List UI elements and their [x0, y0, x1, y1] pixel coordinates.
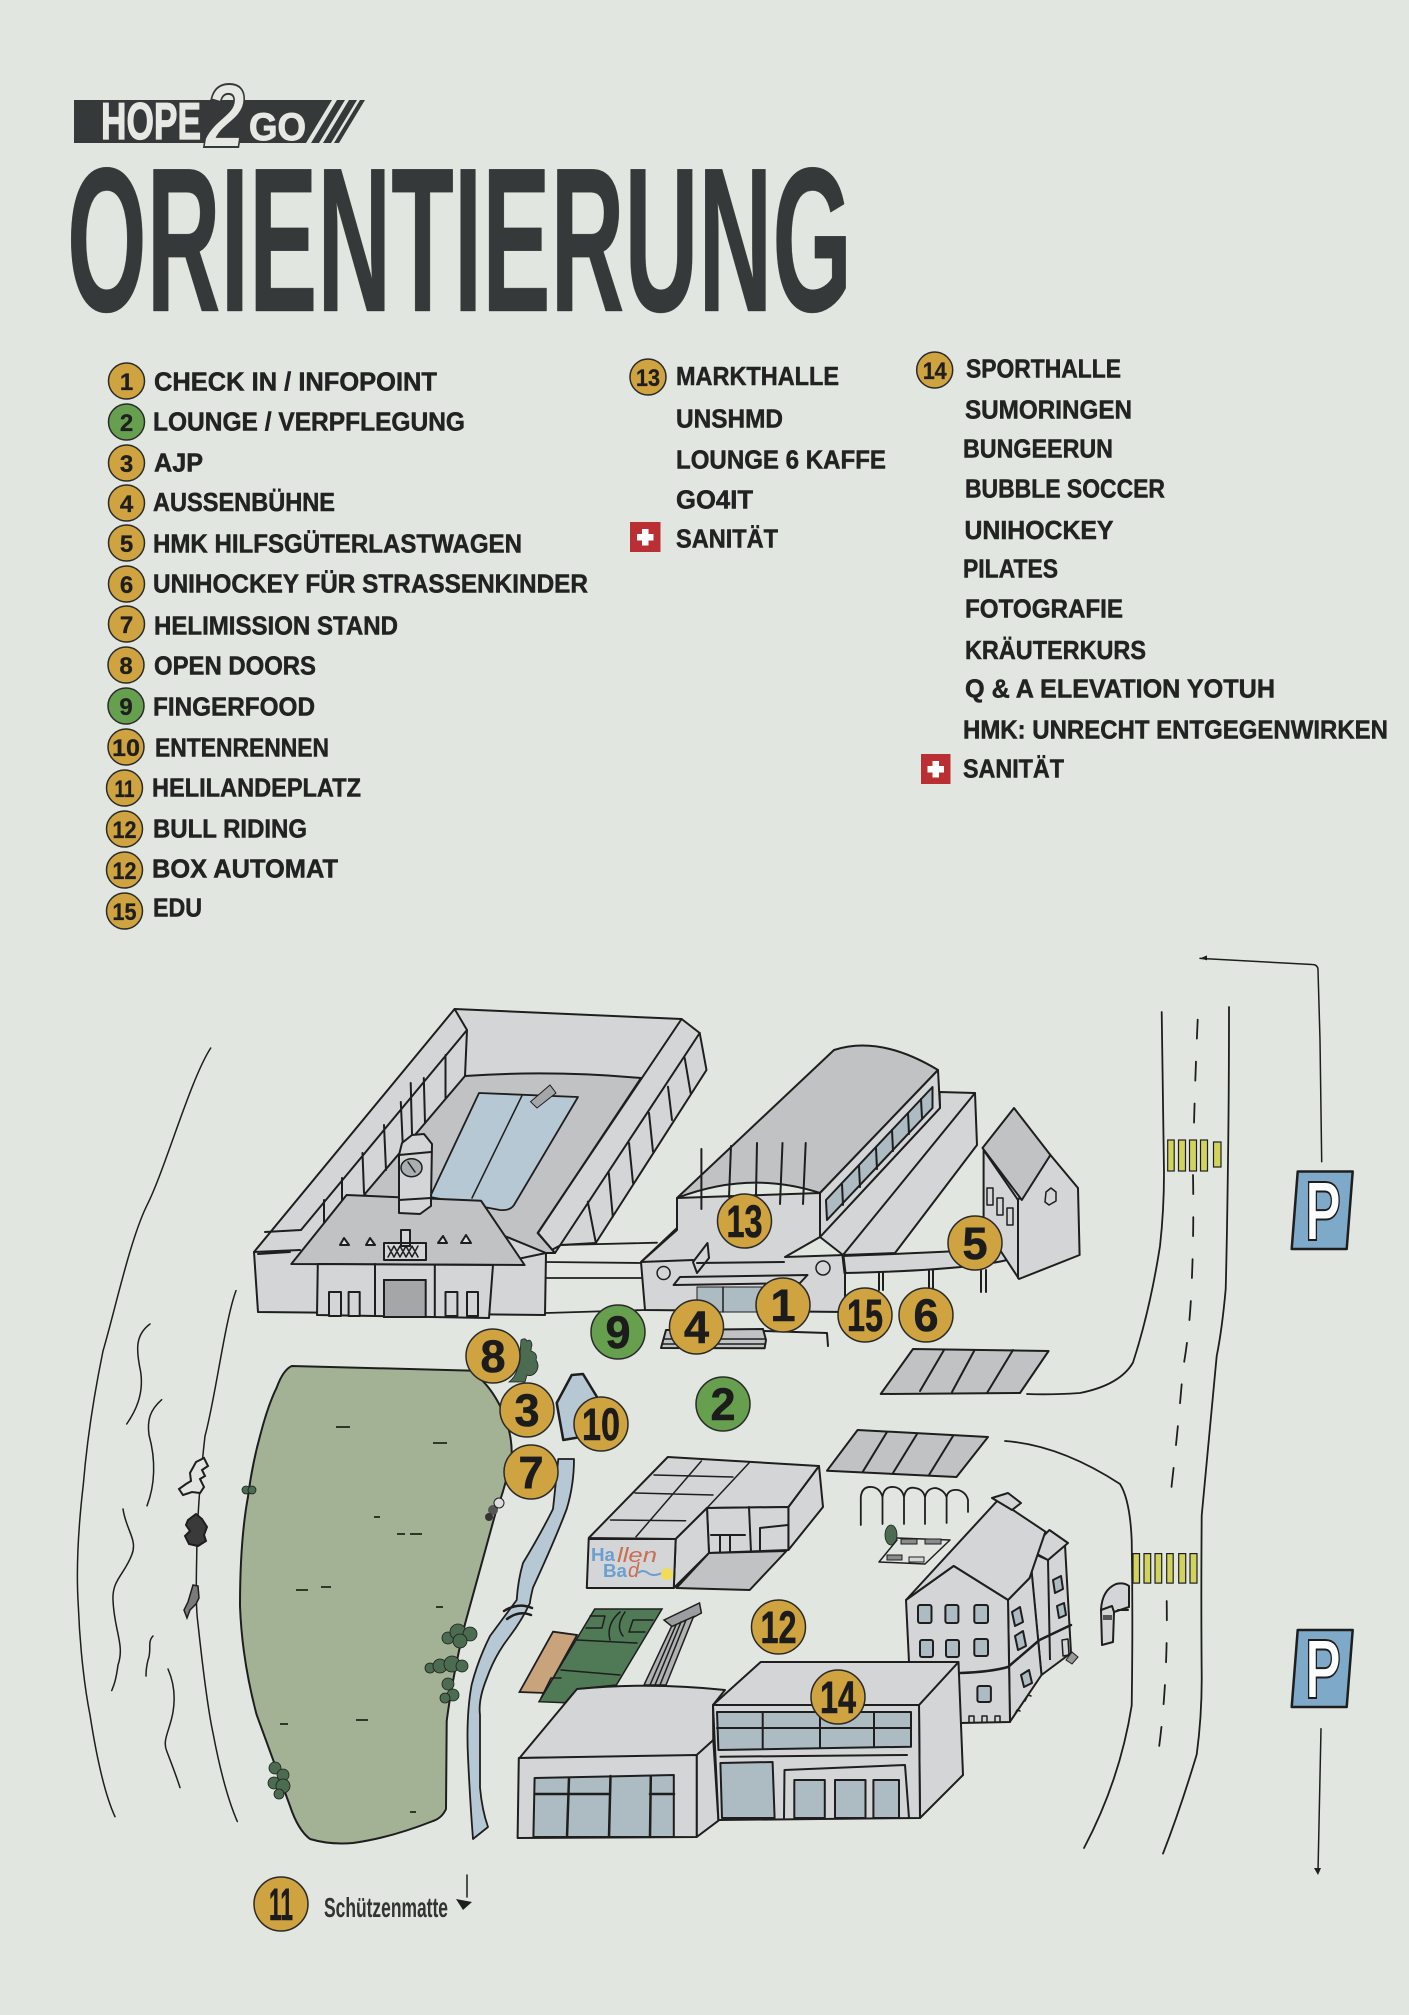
entrance glass: [697, 1287, 763, 1312]
legend item 11: [106, 770, 361, 806]
picnic area: [879, 1525, 950, 1564]
side wall: [1008, 1550, 1042, 1722]
clock tower: [399, 1134, 432, 1214]
marker 10: 10: [582, 1399, 620, 1450]
legend item 12: [106, 811, 307, 847]
dormers: [340, 1235, 471, 1245]
marker 2: [696, 1377, 750, 1431]
logo: Hope2Go: HOPE: [101, 93, 201, 151]
clerestory: [826, 1087, 932, 1220]
marker 14: 14: [820, 1672, 856, 1723]
parking area south: [827, 1430, 988, 1477]
logo: Hope2Go: 2: [203, 67, 245, 167]
building: Hallenbad: [587, 1457, 823, 1590]
footbridge: [504, 1606, 532, 1619]
floor band: [960, 1625, 1071, 1673]
marker 3: 3: [514, 1385, 540, 1436]
marker 1: [756, 1278, 810, 1332]
marker 13: [630, 359, 666, 395]
centre dashes south: [1157, 1601, 1167, 1764]
legend item 9: [108, 688, 315, 724]
legend item 9: 9: [119, 694, 133, 721]
marker 14: 14: [923, 358, 947, 385]
list Markthalle: LOUNGE 6 KAFFE: [676, 445, 886, 475]
marker 9: [591, 1305, 645, 1359]
crosswalk south: [1133, 1554, 1197, 1583]
Hallenbad lettering: d: [628, 1560, 640, 1582]
legend item 2: LOUNGE / VERPFLEGUNG: [153, 407, 465, 437]
marker 9: 9: [605, 1307, 631, 1358]
list Sporthalle: SANITÄT: [963, 754, 1064, 784]
legend item 2: [108, 404, 465, 440]
legend item 15: 15: [112, 899, 136, 926]
pool basin: [430, 1093, 578, 1210]
list Markthalle: UNSHMD: [676, 404, 783, 434]
windows: [918, 1576, 1078, 1722]
parking sign north: P: [1305, 1164, 1341, 1258]
legend item 9: FINGERFOOD: [153, 691, 315, 721]
marker 13: 13: [636, 365, 660, 392]
marker 4: [670, 1300, 724, 1354]
legend item 1: 1: [120, 369, 133, 396]
list Sporthalle: SPORTHALLE: [966, 354, 1121, 384]
front facade: [317, 1264, 493, 1318]
marker 8: [466, 1329, 520, 1383]
front wall: [641, 1193, 845, 1312]
list Sporthalle: UNIHOCKEY: [964, 515, 1114, 545]
Hallenbad lettering: Ba: [603, 1561, 628, 1581]
sports courts: [520, 1603, 701, 1703]
legend item 8: 8: [119, 653, 133, 680]
list Sporthalle: KRÄUTERKURS: [965, 635, 1146, 665]
legend item 3: 3: [120, 451, 133, 478]
tan court: [520, 1632, 577, 1693]
stand: [664, 1603, 701, 1628]
building: Sporthalle: [518, 1662, 963, 1838]
marker 6: 6: [913, 1290, 939, 1341]
river lines: [77, 1048, 237, 1822]
marker 11: 11: [269, 1879, 293, 1930]
list Sporthalle: BUNGEERUN: [963, 434, 1113, 464]
right hall upper glazing: [717, 1712, 911, 1750]
roof detail: [384, 1230, 426, 1260]
legend item 5: 5: [120, 531, 133, 558]
list Sporthalle: PILATES: [963, 554, 1058, 584]
legend column 2: Markthalle: [630, 359, 886, 554]
list Markthalle: [676, 361, 886, 554]
list Sporthalle: Q & A ELEVATION YOTUH: [965, 674, 1275, 704]
office building: [906, 1493, 1078, 1723]
left hall front: [518, 1755, 697, 1838]
marker 5: 5: [962, 1218, 988, 1269]
tree next to marker 8: [509, 1339, 538, 1382]
grass marks: [280, 1427, 447, 1812]
windows: [329, 1292, 478, 1316]
Hallenbad lettering: llen: [617, 1545, 657, 1567]
building: open-air pool: [254, 1009, 706, 1318]
legend item 8: [108, 647, 316, 683]
legend item 3: [108, 445, 203, 481]
parking area north: [881, 1349, 1049, 1394]
legend item 5: HMK HILFSGÜTERLASTWAGEN: [153, 529, 522, 559]
marker 2: 2: [710, 1379, 736, 1430]
list Markthalle: GO4IT: [676, 485, 753, 515]
label: Schützenmatte: Schützenmatte: [324, 1892, 448, 1923]
trees by meadow: [242, 1486, 504, 1799]
arrow to Schützenmatte: [456, 1875, 472, 1910]
parking sign north: [1292, 1164, 1353, 1258]
map markers: [254, 1194, 1002, 1931]
list Sporthalle: FOTOGRAFIE: [965, 594, 1123, 624]
crosswalk north: [1168, 1140, 1221, 1171]
right hall side: [919, 1662, 963, 1818]
roof: [906, 1500, 1045, 1600]
legend item 12: BULL RIDING: [153, 814, 307, 844]
list Sporthalle: [963, 354, 1388, 784]
ribs: [701, 1143, 806, 1209]
right hall front: [713, 1705, 920, 1820]
awning: [843, 1248, 1018, 1273]
legend item 12b: [106, 852, 338, 888]
Hallenbad lettering: Ha: [591, 1545, 616, 1565]
pool deck: [364, 1073, 641, 1253]
marker 7: 7: [518, 1447, 544, 1498]
house: [982, 1108, 1080, 1279]
legend item 15: [106, 893, 202, 929]
list Sporthalle: BUBBLE SOCCER: [965, 474, 1165, 504]
legend item 10: [108, 729, 329, 765]
legend item 6: 6: [120, 572, 133, 599]
logo: Hope2Go: GO: [249, 106, 306, 149]
bike shelters: [861, 1487, 968, 1525]
marker 5: [948, 1216, 1002, 1270]
diving board: [530, 1085, 556, 1108]
marker 7: [504, 1445, 558, 1499]
list Markthalle: MARKTHALLE: [676, 361, 839, 391]
legend column 1: [106, 363, 588, 929]
green court: [539, 1609, 662, 1703]
legend item 10: ENTENRENNEN: [155, 732, 329, 762]
road: [1005, 1007, 1229, 1854]
building: Markthalle: [641, 1046, 1018, 1312]
logo: Hope2Go: [74, 67, 365, 167]
legend item 4: [108, 485, 335, 521]
marker 12: 12: [760, 1602, 796, 1653]
legend column 3: Sporthalle: [917, 352, 1388, 784]
legend item 11: HELILANDEPLATZ: [152, 773, 361, 803]
side wing: [820, 1092, 977, 1255]
connecting wing: [546, 1243, 657, 1313]
marker 14: [917, 352, 953, 388]
legend item 10: 10: [112, 735, 140, 762]
icon: red cross: [630, 522, 660, 552]
marker 8: 8: [480, 1331, 506, 1382]
left hall glazing: [533, 1775, 674, 1837]
outdoor stage: [661, 1329, 828, 1348]
door: [384, 1280, 426, 1317]
marker 4: 4: [684, 1302, 709, 1353]
legend item 1: CHECK IN / INFOPOINT: [154, 367, 437, 397]
arrow to south parking: [1314, 1729, 1321, 1875]
marker 1: 1: [770, 1280, 796, 1331]
marker 13: 13: [726, 1196, 762, 1247]
legend item 7: HELIMISSION STAND: [154, 610, 398, 640]
list Markthalle: SANITÄT: [676, 524, 778, 554]
legend item 12b: 12: [112, 858, 136, 885]
hexagon pool: [557, 1374, 597, 1440]
legend item 2: 2: [120, 410, 133, 437]
roof: [677, 1046, 938, 1198]
parking sign south: P: [1305, 1622, 1341, 1716]
left hall top: [520, 1686, 725, 1758]
wall frames: [254, 1009, 700, 1265]
bus shelter: [1101, 1583, 1129, 1645]
pool outer walls: [254, 1009, 706, 1315]
marker 3: [500, 1383, 554, 1437]
legend item 3: AJP: [154, 448, 203, 478]
legend item 15: EDU: [153, 893, 202, 923]
tower: [1030, 1545, 1071, 1675]
right hall top: [713, 1662, 958, 1705]
entrance canopy: [674, 1275, 808, 1285]
legend item 11: 11: [114, 776, 134, 803]
trees on river bank: [179, 1458, 208, 1618]
list Sporthalle: SUMORINGEN: [965, 395, 1132, 425]
icon: red cross: [921, 754, 950, 784]
pond / meadow: [240, 1366, 512, 1844]
legend item 7: 7: [120, 612, 133, 639]
legend item 7: [108, 606, 398, 642]
left hall side: [697, 1740, 718, 1837]
legend item 12: 12: [112, 817, 136, 844]
parking sign south: [1292, 1622, 1353, 1716]
marker 15: 15: [847, 1290, 883, 1341]
legend item 8: OPEN DOORS: [154, 651, 316, 681]
marker 11: [254, 1877, 308, 1931]
stream: [467, 1459, 574, 1839]
front roof: [291, 1195, 525, 1265]
arrow to north parking: [1200, 955, 1322, 1162]
legend item 4: AUSSENBÜHNE: [153, 487, 335, 517]
right hall lower glazing: [720, 1762, 775, 1818]
centre dashes north: [1171, 1020, 1198, 1494]
front: [906, 1566, 1010, 1723]
Hallenbad lettering: [591, 1545, 673, 1582]
legend item 6: UNIHOCKEY FÜR STRASSENKINDER: [153, 568, 588, 598]
window side: [820, 1070, 940, 1237]
clock: [401, 1159, 422, 1177]
marker 6: [899, 1288, 953, 1342]
legend item 4: 4: [120, 491, 134, 518]
legend item 12b: BOX AUTOMAT: [152, 854, 338, 884]
